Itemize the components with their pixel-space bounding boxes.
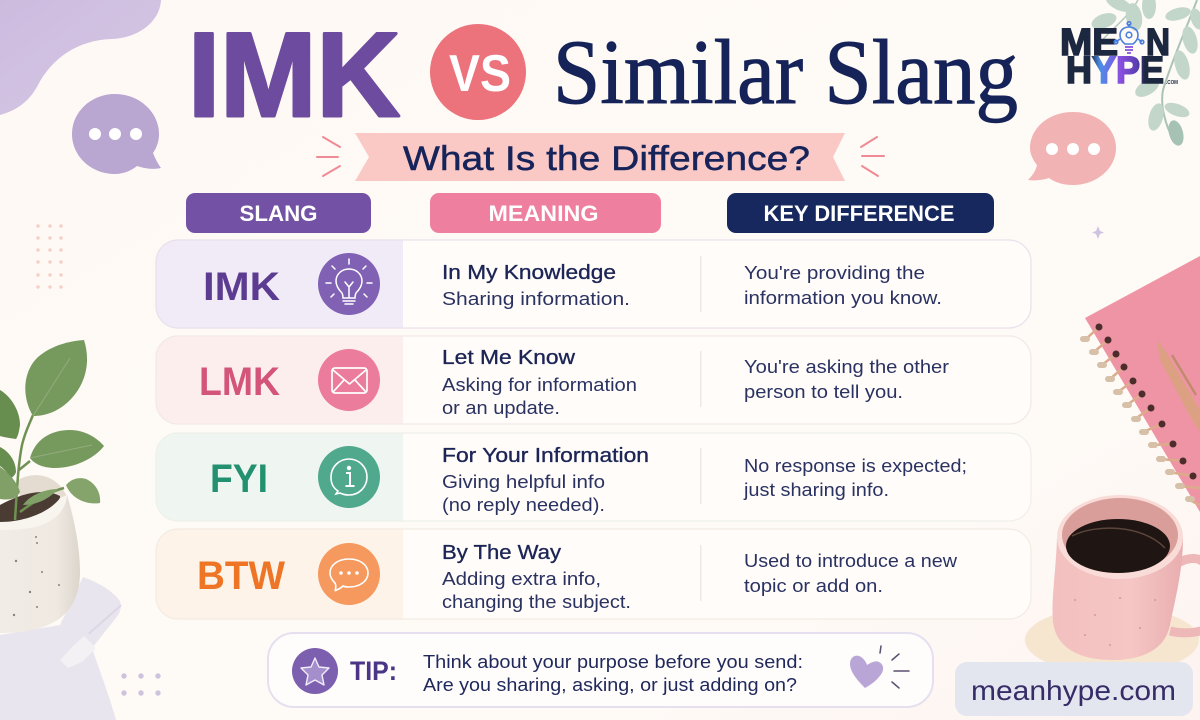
logo: MeanHype <box>1060 22 1178 92</box>
icon: info <box>318 446 380 508</box>
VS circle: VS <box>449 45 511 103</box>
row: BTW: BTW <box>197 554 285 598</box>
row: FYI: just sharing info. <box>743 479 889 500</box>
plant in pot <box>0 340 104 633</box>
pot back rim <box>18 475 67 505</box>
row: FYI: No response is expected; <box>744 455 967 476</box>
row: BTW: topic or add on. <box>744 575 883 596</box>
title: Similar Slang: Similar Slang <box>553 21 1018 123</box>
logo: MeanHype: HYPE <box>1066 50 1164 92</box>
pot body <box>0 495 80 633</box>
website badge: meanhype.com <box>971 675 1176 706</box>
pink dot grid <box>36 224 63 289</box>
decorative leaves top right <box>1089 0 1200 147</box>
lavender dot grid <box>121 673 161 696</box>
row: LMK: person to tell you. <box>744 381 903 402</box>
stems <box>15 415 64 520</box>
column header: key difference <box>727 193 994 233</box>
row: BTW: By The Way <box>442 542 561 564</box>
icon: envelope <box>318 349 380 411</box>
row: BTW <box>156 529 1031 619</box>
tip box: TIP: <box>350 656 397 686</box>
icon: logo light bulb <box>1114 22 1144 53</box>
ribbon subtitle <box>355 133 845 181</box>
pink speech bubble <box>1028 112 1116 185</box>
row: IMK: Sharing information. <box>442 288 630 309</box>
row: LMK: LMK <box>199 360 280 404</box>
row: FYI: FYI <box>210 457 268 501</box>
row: BTW: changing the subject. <box>442 591 631 612</box>
row: BTW: Used to introduce a new <box>744 550 958 571</box>
icon: star <box>292 648 338 694</box>
row: LMK: Asking for information <box>442 374 637 395</box>
row: FYI <box>156 433 1031 521</box>
column header: slang: SLANG <box>240 201 318 226</box>
title: IMK: IMK <box>188 8 400 142</box>
column header: meaning: MEANING <box>488 201 598 226</box>
column header: meaning <box>430 193 661 233</box>
row: IMK: In My Knowledge <box>442 262 616 284</box>
row: IMK <box>156 240 1031 328</box>
table shadow surface under plant <box>0 577 126 720</box>
row: FYI: (no reply needed). <box>442 494 605 515</box>
ribbon sparks <box>317 137 884 176</box>
decorative lavender blob <box>0 0 161 115</box>
row: LMK <box>156 336 1031 424</box>
row: LMK: You're asking the other <box>744 356 949 377</box>
logo: MeanHype: N <box>1146 22 1170 64</box>
row: FYI: Giving helpful info <box>442 471 605 492</box>
website badge <box>955 662 1193 716</box>
VS circle <box>430 24 526 120</box>
tip box <box>268 633 933 707</box>
sparkle <box>1092 226 1104 239</box>
spiral binding <box>1086 327 1200 505</box>
ribbon subtitle: What Is the Difference? <box>403 140 810 178</box>
coffee mug on coaster <box>1025 495 1200 674</box>
spiral tabs <box>1083 339 1192 499</box>
row: BTW: Adding extra info, <box>442 568 601 589</box>
leaves <box>25 340 87 416</box>
icon: light bulb <box>318 253 380 315</box>
row: LMK: or an update. <box>442 397 560 418</box>
pen <box>1157 340 1200 432</box>
column header: slang <box>186 193 371 233</box>
tip box: Think about your purpose before you send: <box>423 651 803 672</box>
icon: chat bubble <box>318 543 380 605</box>
logo: MeanHype: .COM <box>1166 80 1178 86</box>
column header: key difference: KEY DIFFERENCE <box>764 201 954 226</box>
row: IMK: information you know. <box>744 287 942 308</box>
row: IMK: IMK <box>203 265 280 309</box>
row: IMK: You're providing the <box>744 262 925 283</box>
lavender speech bubble <box>72 94 161 174</box>
tip box: Are you sharing, asking, or just adding on? <box>423 674 797 695</box>
logo: MeanHype: ME <box>1060 22 1118 64</box>
soil <box>0 492 60 524</box>
notebook and pen <box>1083 256 1200 512</box>
row: FYI: For Your Information <box>442 445 649 467</box>
icon: heart with sparks <box>850 646 909 688</box>
row: LMK: Let Me Know <box>442 347 576 369</box>
